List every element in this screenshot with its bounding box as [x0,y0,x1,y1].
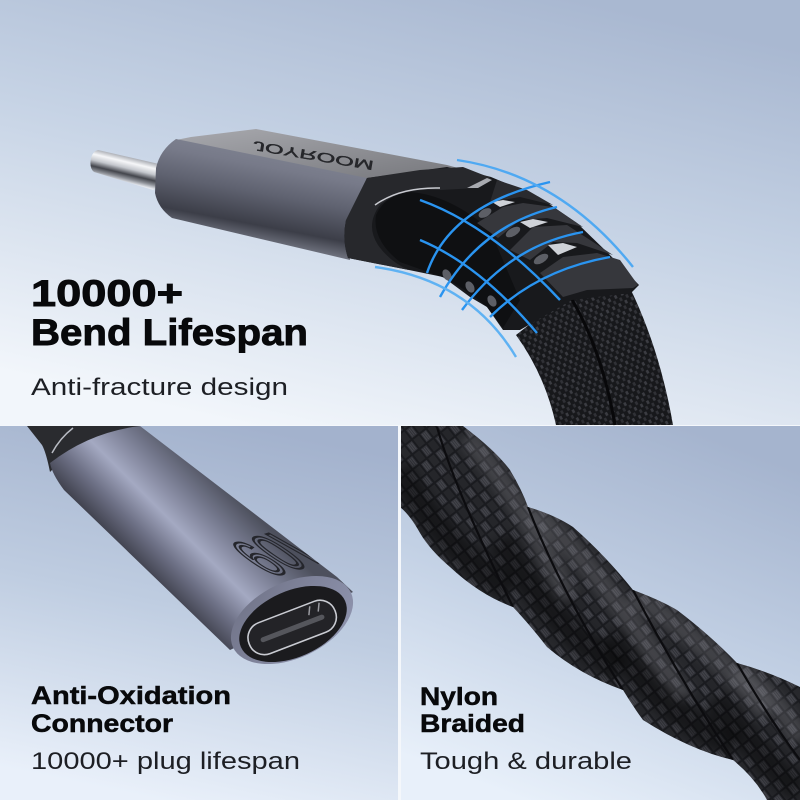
fin chips [492,200,577,255]
heading: Bend Lifespan [31,312,308,353]
braid silhouette [400,426,800,800]
aluminium barrel [50,426,353,650]
panel: anti-oxidation connector [0,426,398,800]
connector illustration [27,426,353,664]
capacity marking: 60W [213,515,357,586]
connector top face with brand: JOYROOM [252,138,375,173]
heading: Anti-Oxidation [31,682,231,710]
connector aluminium body [155,139,367,260]
strain relief: black segmented collar [344,167,639,330]
braided cable: left strand [516,288,673,425]
inner cable glimpses [441,206,550,308]
socket shadow [376,192,520,328]
subheading: 10000+ plug lifespan [31,748,300,775]
neck chamfer highlight [52,428,73,453]
subheading: Tough & durable [420,748,632,775]
heading: Nylon [420,683,498,711]
icon: USB-C metal plug [90,150,185,190]
subheading: Anti-fracture design [31,374,288,401]
top plate highlight [467,178,492,188]
strand divider [571,298,615,425]
USB-C port [247,599,338,656]
socket rim highlight [375,188,440,205]
icon: blue flex arcs [375,160,633,357]
port face [239,586,347,662]
strand shadows [400,470,800,790]
panel: nylon braided [400,426,800,800]
fins [477,180,638,297]
connector top face with brand [176,129,491,180]
panel: 10000+ bend lifespan [0,0,800,425]
twisted nylon cable [400,426,800,800]
heading [31,273,308,353]
connector rim [231,576,353,664]
heading: 10000+ [31,273,183,314]
heading: Connector [31,710,173,738]
strand seams [437,427,800,760]
heading: Braided [420,710,525,738]
strand highlights [468,437,800,740]
heading [31,682,231,738]
heading [420,683,525,738]
cable neck [27,426,140,472]
